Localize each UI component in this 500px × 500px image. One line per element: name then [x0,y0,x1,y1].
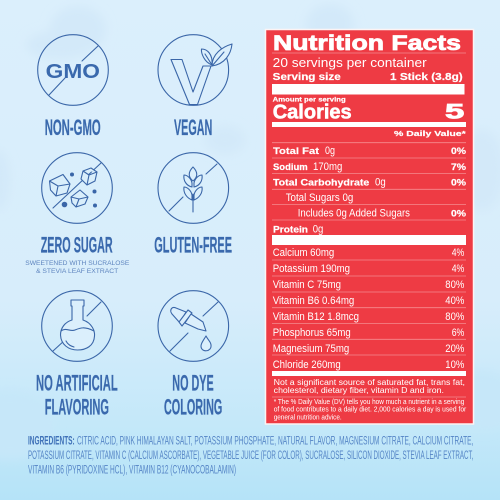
vitamin and mineral rows: 4% [452,263,464,275]
vitamin and mineral rows: Phosphorus 65mg [273,327,351,339]
macronutrient rows: 0% [451,178,467,188]
vitamin and mineral rows: Calcium 60mg [273,247,334,259]
badge: no dye coloring [158,291,229,419]
daily value footnote [274,399,467,422]
icon: V with leaves [158,35,232,105]
macronutrient rows: 0% [451,208,467,220]
servings text: 20 servings per container [273,55,427,70]
icon: sugar cubes crossed circle [42,153,112,223]
badge: no artificial flavoring [36,291,118,419]
label: NO ARTIFICIAL FLAVORING [36,371,118,419]
calories: Calories [273,100,352,124]
vitamin and mineral rows [272,247,466,371]
vitamin and mineral rows: Magnesium 75mg [273,343,349,355]
note: sweeteners [25,260,129,275]
icon: wheat crossed circle [158,153,229,223]
serving size: 1 Stick (3.8g) [390,72,463,83]
vitamin and mineral rows: Vitamin B6 0.64mg [273,295,354,307]
label: NO DYE COLORING [164,371,222,419]
calories [273,100,465,124]
serving size [273,72,463,83]
vitamin and mineral rows: 10% [445,359,464,371]
macronutrient rows: 0% [451,146,467,157]
badge: no dye coloring: COLORING [164,394,222,419]
macronutrient rows: 170mg [313,161,342,173]
ingredients text: INGREDIENTS: [28,436,75,448]
label: NO ARTIFICIAL FLAVORING: FLAVORING [45,394,109,419]
amount per serving: Amount per serving [273,96,346,104]
badge: vegan [158,35,232,140]
macronutrient rows: 0g [325,145,335,157]
macronutrient rows: 0g [313,224,323,236]
note: sweeteners: & STEVIA LEAF EXTRACT [36,268,119,275]
ingredients text [28,436,473,476]
macronutrient rows: 7% [451,162,467,173]
daily value footnote: general nutrition advice. [274,414,342,422]
macronutrient rows: Total Fat [273,146,320,157]
daily value header: % Daily Value* [394,129,466,138]
vitamin and mineral rows: 80% [445,311,464,323]
daily value footnote: of food contributes to a daily diet. 2,000 calories a day is used for [274,406,467,414]
not a significant source note [274,378,465,395]
macronutrient rows: Protein [273,224,308,236]
macronutrient rows: Total Carbohydrate [273,178,369,188]
not a significant source note: Not a significant source of saturated fat, trans fat, [274,378,465,387]
macronutrient rows [272,145,467,236]
macronutrient rows: Sodium [273,162,308,173]
macronutrient rows: 0g [375,176,386,188]
vitamin and mineral rows: 6% [452,327,464,339]
label: NO ARTIFICIAL FLAVORING: NO ARTIFICIAL [36,371,118,396]
vitamin and mineral rows: 4% [452,247,464,259]
icon: dropper crossed circle [158,291,229,361]
badge: vegan: VEGAN [174,115,212,140]
vitamin and mineral rows: Vitamin B12 1.8mcg [273,311,359,323]
vitamin and mineral rows: 80% [445,279,464,291]
label: NO DYE COLORING: NO DYE [172,371,214,396]
macronutrient rows: Total Sugars 0g [286,192,353,204]
panel: nutrition facts [266,30,474,424]
text: GLUTEN-FREE [154,232,232,257]
ingredients text: VITAMIN B6 (PYRIDOXINE HCL), VITAMIN B12 (CYANOCOBALAMIN) [28,464,236,476]
icon: GMO crossed circle: GMO [46,61,100,83]
label: NON-GMO: NON-GMO [45,115,101,140]
not a significant source note: cholesterol, dietary fiber, vitamin D and iron. [274,386,444,395]
daily value footnote: * The % Daily Value (DV) tells you how much a nutrient in a serving [274,399,464,406]
badge: zero sugar: ZERO SUGAR [41,232,113,257]
panel background [266,30,474,424]
vitamin and mineral rows: Vitamin C 75mg [273,279,341,291]
serving size: Serving size [273,72,341,83]
vitamin and mineral rows: 20% [445,343,464,355]
icon: flask crossed circle [42,291,112,361]
vitamin and mineral rows: Potassium 190mg [273,263,350,275]
vitamin and mineral rows: Chloride 260mg [273,359,341,371]
calories: 5 [445,100,465,124]
badge: non-GMO [38,35,108,140]
badge: gluten-free [154,153,232,257]
note: sweeteners: SWEETENED WITH SUCRALOSE [25,260,129,267]
vitamin and mineral rows: 40% [445,295,464,307]
badge: zero sugar [25,153,129,275]
macronutrient rows: Includes 0g Added Sugars [298,208,410,220]
title: Nutrition Facts: Nutrition Facts [273,32,461,55]
